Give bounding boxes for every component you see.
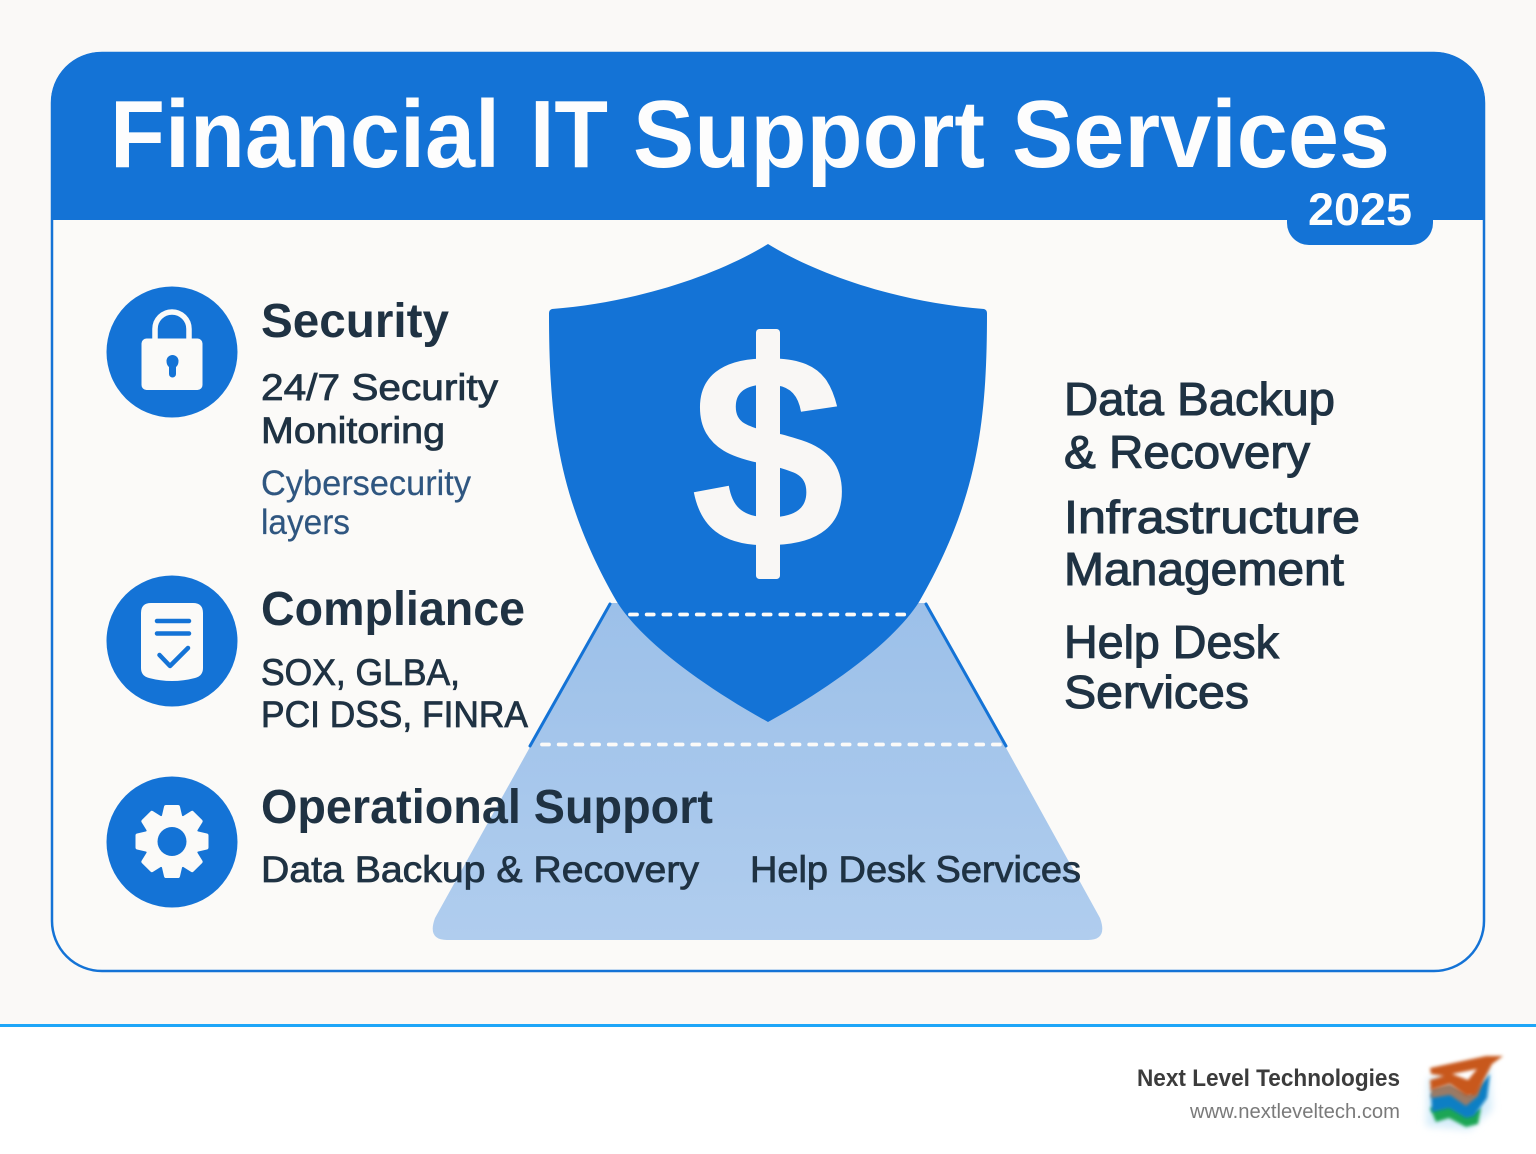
footer [0,1024,1536,1154]
title: Financial [110,81,500,188]
text: data backup and recovery: Data Backup [1064,373,1335,425]
text: 24/7 monitoring: Monitoring [261,410,445,451]
title: Services [1012,81,1390,188]
text: 24/7 monitoring: 24/7 Security [261,367,499,408]
text: data backup and recovery: & Recovery [1064,426,1310,478]
text: operational items [261,849,1081,890]
section: operational support [261,781,1081,890]
text: regulations: SOX, GLBA, [261,652,460,693]
dashed tier line: upper [630,613,908,616]
text: 24/7 monitoring [261,367,499,451]
footer company name: Next Level Technologies [1137,1065,1400,1092]
title: Support [633,81,985,188]
icon: padlock [106,286,238,418]
text: data backup and recovery [1064,373,1335,478]
year tab [1287,184,1433,245]
heading: operational support: Operational Support [261,781,713,834]
pyramid outline: right edge [926,604,1006,746]
icon: gear [106,776,238,908]
dollar sign stem [756,329,780,579]
right column: services list [1064,373,1360,718]
pyramid base [433,603,1102,940]
shield with dollar sign [549,244,987,722]
text: regulations: PCI DSS, FINRA [261,694,528,735]
icon: company logo [1426,1056,1503,1130]
year tab: 2025 [1308,184,1412,235]
icon: compliance document [106,576,238,706]
text: operational items: Data Backup & Recovery [261,849,700,890]
text: infrastructure management [1064,491,1360,595]
panel: header banner [51,52,1485,220]
text: cybersecurity layers: layers [261,503,350,542]
text: operational items: Help Desk Services [750,849,1081,890]
text: help desk services [1064,616,1280,718]
panel: main card [52,53,1484,971]
section: security [261,295,499,542]
text: help desk services: Services [1064,666,1249,718]
text: infrastructure management: Management [1064,543,1344,595]
title: IT [530,81,608,188]
pyramid outline: left edge [530,604,610,746]
dashed tier line: lower [542,743,1000,746]
text: cybersecurity layers: Cybersecurity [261,464,471,503]
title [110,81,1390,188]
footer url: www.nextleveltech.com [1189,1101,1400,1123]
text: regulations [261,652,528,735]
text: help desk services: Help Desk [1064,616,1280,668]
text: cybersecurity layers [261,464,471,542]
section: compliance [261,583,528,735]
text: infrastructure management: Infrastructure [1064,491,1360,543]
heading: compliance: Compliance [261,583,525,636]
heading: security: Security [261,295,449,348]
dollar sign: $ [690,296,846,608]
